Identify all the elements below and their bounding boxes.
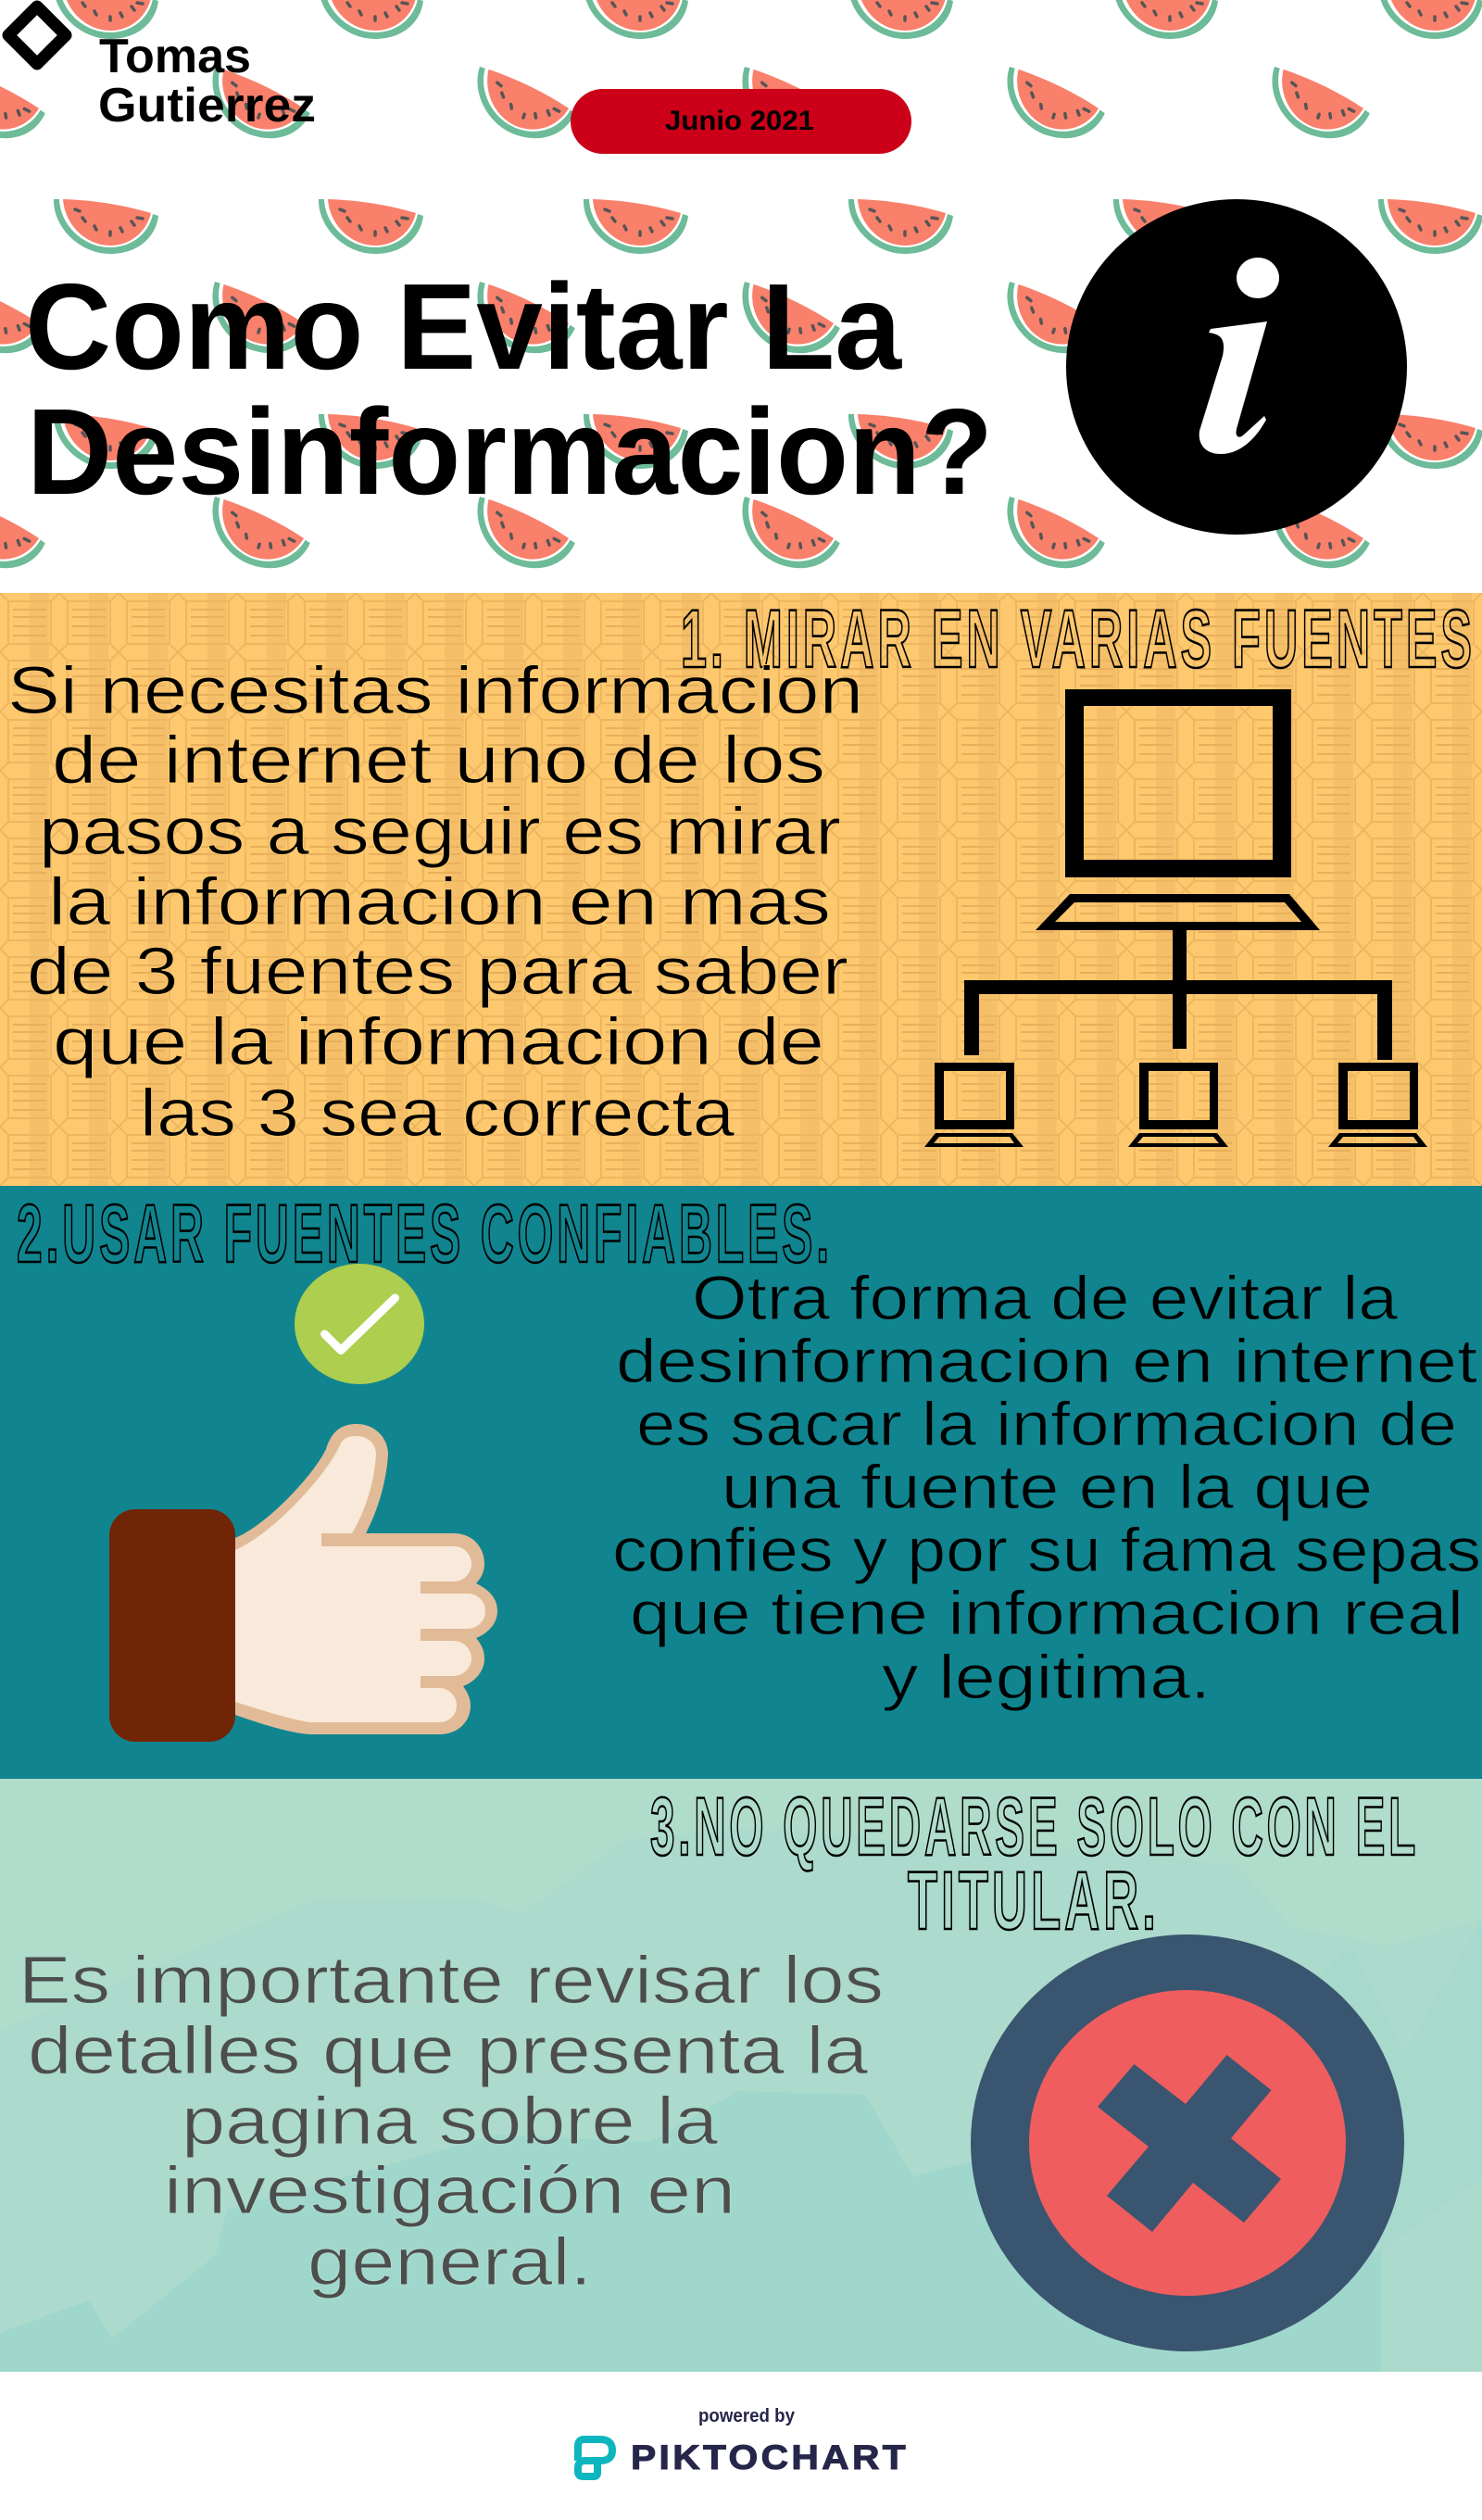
- body text: step 1: pasos a seguir es mirar: [39, 795, 841, 869]
- date pill: [571, 89, 911, 154]
- body text: step 2: una fuente en la que: [722, 1453, 1373, 1522]
- heading: step 2: 2.USAR FUENTES CONFIABLES.: [17, 1187, 833, 1279]
- header panel with watermelon pattern: [0, 0, 1482, 593]
- heading: step 3: [650, 1780, 1419, 1947]
- body text: step 3: pagina sobre la: [182, 2085, 719, 2159]
- panel: step 2 teal: [0, 1186, 1482, 1779]
- icon: computer network: [924, 689, 1427, 1147]
- powered by label: powered by: [698, 2406, 796, 2426]
- body text: step 2: y legitima.: [882, 1643, 1211, 1712]
- title: Como Evitar La: [25, 258, 903, 395]
- body text: step 3: detalles que presenta la: [28, 2014, 869, 2088]
- body text: step 1: las 3 sea correcta: [140, 1077, 735, 1151]
- body text: step 2: Otra forma de evitar la: [692, 1264, 1399, 1333]
- body text: step 2: confies y por su fama sepas: [612, 1516, 1481, 1585]
- piktochart wordmark: PIKTOCHART: [631, 2438, 909, 2476]
- body text: step 1: Si necesitas informacion: [7, 654, 863, 728]
- body text: step 3: [19, 1944, 884, 2300]
- icon: information circle: [1066, 199, 1407, 535]
- body text: step 2: [612, 1264, 1481, 1712]
- icon: check badge: [295, 1264, 424, 1384]
- panel: step 3 green: [0, 1779, 1482, 2372]
- icon: thumbs up hand: [109, 1424, 497, 1742]
- body text: step 1: [7, 654, 863, 1151]
- body text: step 1: la informacion en mas: [48, 865, 831, 939]
- author name: Tomas: [99, 30, 251, 83]
- body text: step 1: de 3 fuentes para saber: [27, 935, 848, 1009]
- body text: step 3: investigación en: [164, 2154, 735, 2228]
- body text: step 3: Es importante revisar los: [19, 1944, 884, 2018]
- title: [25, 258, 993, 520]
- body text: step 2: que tiene informacion real: [630, 1579, 1463, 1648]
- body text: step 2: desinformacion en internet: [616, 1327, 1477, 1396]
- date pill: Junio 2021: [665, 106, 814, 136]
- author name: Gutierrez: [98, 79, 316, 132]
- body text: step 1: que la informacion de: [53, 1005, 824, 1079]
- panel: step 1 yellow: [0, 592, 1482, 1186]
- body text: step 2: es sacar la informacion de: [636, 1390, 1457, 1459]
- icon: X badge: [971, 1934, 1404, 2351]
- author name: [98, 30, 316, 132]
- body text: step 3: general.: [308, 2225, 592, 2300]
- heading: step 3: TITULAR.: [908, 1854, 1160, 1947]
- footer: [0, 2372, 1482, 2520]
- icon: piktochart logo: [578, 2439, 612, 2476]
- icon: logo diamond: [8, 6, 66, 64]
- body text: step 1: de internet uno de los: [52, 724, 825, 798]
- title: Desinformacion?: [27, 384, 993, 520]
